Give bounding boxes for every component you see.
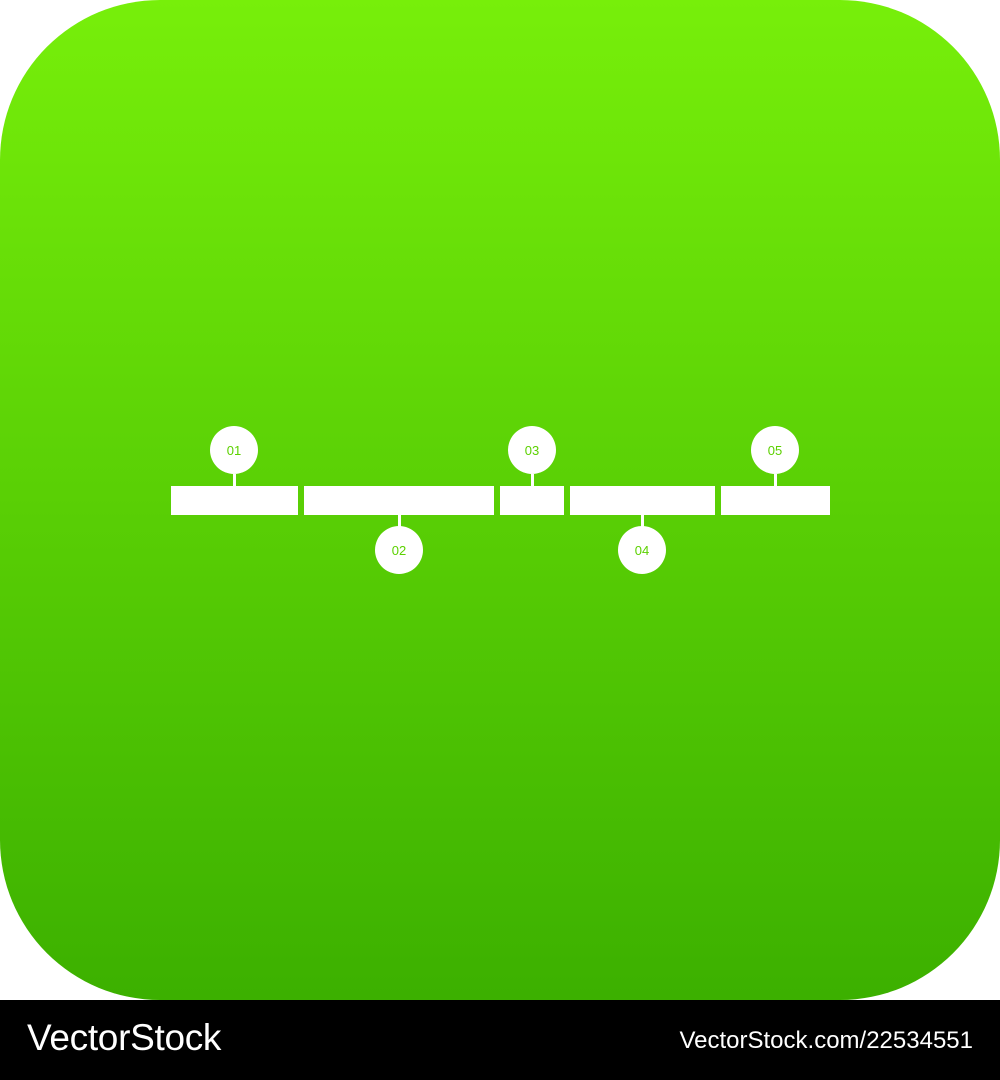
marker 02 <box>375 526 423 574</box>
marker 01 <box>210 426 258 474</box>
marker 03 <box>508 426 556 474</box>
timeline <box>171 426 830 574</box>
marker 03: 03 <box>525 442 539 458</box>
connector 02 <box>398 515 401 528</box>
marker 04: 04 <box>635 542 649 558</box>
segment 1 <box>171 486 298 515</box>
footer bar <box>0 1000 1000 1080</box>
footer logo text: VectorStock <box>27 1017 221 1058</box>
marker 05 <box>751 426 799 474</box>
segment 3 <box>500 486 564 515</box>
connector 04 <box>641 515 644 528</box>
segment 4 <box>570 486 715 515</box>
marker 05: 05 <box>768 442 782 458</box>
marker 01: 01 <box>227 442 241 458</box>
marker 02: 02 <box>392 542 406 558</box>
connector 03 <box>531 474 534 487</box>
marker 04 <box>618 526 666 574</box>
footer id text: VectorStock.com/22534551 <box>679 1027 973 1054</box>
connector 01 <box>233 474 236 487</box>
segment 2 <box>304 486 494 515</box>
connector 05 <box>774 474 777 487</box>
segment 5 <box>721 486 830 515</box>
